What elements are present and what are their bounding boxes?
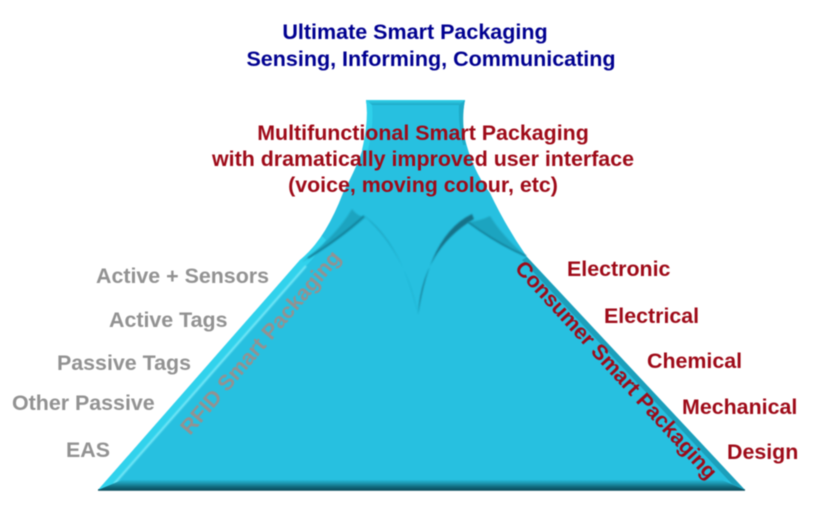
left labels: RFID levels: Other Passive xyxy=(12,391,155,415)
top bevel xyxy=(366,100,465,105)
right labels: consumer levels: Electronic xyxy=(567,257,671,281)
right labels: consumer levels: Electrical xyxy=(604,304,699,328)
left labels: RFID levels: Passive Tags xyxy=(57,351,191,375)
title xyxy=(246,20,616,71)
right labels: consumer levels xyxy=(567,257,798,464)
right labels: consumer levels: Design xyxy=(727,440,798,464)
left labels: RFID levels: EAS xyxy=(66,438,110,462)
left bevel edge xyxy=(98,236,326,490)
diagonal label: Consumer Smart Packaging: Consumer Smart Packaging xyxy=(510,256,722,484)
title: Ultimate Smart Packaging xyxy=(282,20,548,44)
left labels: RFID levels xyxy=(12,264,269,462)
crease left inner xyxy=(362,214,418,315)
centre heading: multifunctional xyxy=(211,121,634,197)
right labels: consumer levels: Mechanical xyxy=(682,395,797,419)
right bevel edge xyxy=(522,257,745,490)
left labels: RFID levels: Active + Sensors xyxy=(96,264,269,288)
crease right flank xyxy=(468,216,527,257)
diagonal label: RFID Smart Packaging: RFID Smart Packaging xyxy=(176,246,346,439)
crease left flank xyxy=(302,209,366,262)
crease right inner xyxy=(418,214,474,315)
centre heading: multifunctional: with dramatically improved user interface xyxy=(211,147,634,171)
centre heading: multifunctional: (voice, moving colour, etc) xyxy=(288,173,558,197)
centre heading: multifunctional: Multifunctional Smart Packaging xyxy=(257,121,589,145)
bottom bevel xyxy=(98,480,745,490)
right labels: consumer levels: Chemical xyxy=(647,349,742,373)
funnel triangle shape xyxy=(98,100,745,490)
title: Sensing, Informing, Communicating xyxy=(246,47,616,71)
left labels: RFID levels: Active Tags xyxy=(109,308,228,332)
